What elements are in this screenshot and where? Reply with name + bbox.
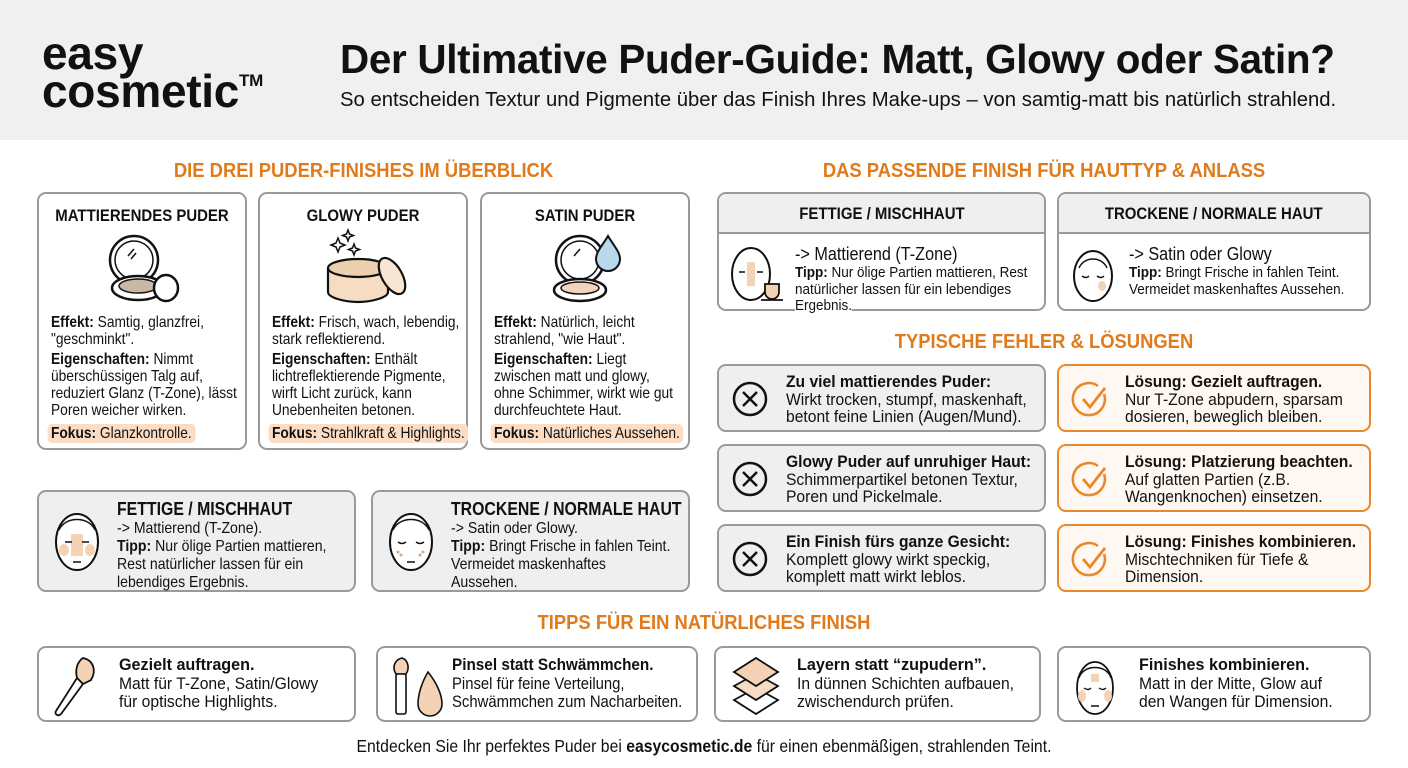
- panel: fettige haut (left): -> Mattierend (T-Zone).: [117, 520, 262, 537]
- panel: satin puder: SATIN PUDER: [535, 206, 635, 225]
- panel: fettige haut (right): [717, 192, 1046, 311]
- tipp 1: Gezielt auftragen.: [119, 655, 255, 674]
- text: Effekt: Samtig, glanzfrei, "geschminkt". Eigenschaften: Nimmt überschüssigen Talg auf, reduziert Glanz (T-Zone), lässt Poren weicher wirken.: [51, 314, 237, 419]
- panel: mattierendes puder: [37, 192, 247, 450]
- loesung 3: Mischtechniken für Tiefe & Dimension.: [1125, 550, 1308, 586]
- footer: Entdecken Sie Ihr perfektes Puder bei easycosmetic.de für einen ebenmäßigen, strahlenden Teint.: [357, 736, 1051, 756]
- fehler 3: [717, 524, 1046, 592]
- heading: hauttyp: DAS PASSENDE FINISH FÜR HAUTTYP & ANLASS: [823, 160, 1265, 182]
- tipp 4: den Wangen für Dimension.: [1139, 693, 1333, 711]
- icon: face: [389, 513, 433, 571]
- loesung 3: [1057, 524, 1371, 592]
- title: Der Ultimative Puder-Guide: Matt, Glowy oder Satin?: [340, 36, 1335, 82]
- panel: fettige haut (left): Tipp: Nur ölige Partien mattieren, Rest natürlicher lassen für ein lebendiges Ergebnis.: [117, 538, 326, 591]
- panel: satin puder: [480, 192, 690, 450]
- loesung 2: [1057, 444, 1371, 512]
- panel: fettige haut (right): -> Mattierend (T-Zone): [795, 244, 958, 264]
- icon: jar with sparkles: [326, 228, 406, 304]
- tipp 3: [714, 646, 1041, 722]
- panel: trockene haut (left): [371, 490, 690, 592]
- logo: cosmeticTM: [42, 65, 263, 117]
- icon: compact with drop: [552, 234, 621, 302]
- loesung 3: Lösung: Finishes kombinieren.: [1125, 532, 1356, 551]
- panel: satin puder: Fokus: Natürliches Aussehen.: [494, 425, 680, 442]
- panel: trockene haut (left): Aussehen.: [451, 574, 518, 591]
- header band: [0, 0, 1408, 140]
- tipp 2: Pinsel statt Schwämmchen.: [452, 655, 654, 674]
- panel: fettige haut (left): FETTIGE / MISCHHAUT: [117, 499, 292, 519]
- panel: satin puder: Effekt: Natürlich, leicht strahlend, "wie Haut". Eigenschaften: Liegt: [494, 314, 635, 368]
- panel: trockene haut (left): Tipp: Bringt Frische in fahlen Teint.: [451, 538, 670, 555]
- tipp 4: Matt in der Mitte, Glow auf: [1139, 674, 1322, 692]
- icon: face: [1073, 250, 1113, 302]
- fehler 2: [717, 444, 1046, 512]
- icon: layers: [732, 656, 780, 716]
- logo: easy: [42, 27, 143, 79]
- loesung 2: Auf glatten Partien (z.B. Wangenknochen) einsetzen.: [1125, 470, 1323, 506]
- tipp 1: für optische Highlights.: [119, 693, 278, 711]
- text: Fokus: Glanzkontrolle.: [51, 425, 192, 442]
- tipp 2: Schwämmchen zum Nacharbeiten.: [452, 693, 682, 711]
- panel: glowy puder: [258, 192, 468, 450]
- heading: finishes: DIE DREI PUDER-FINISHES IM ÜBERBLICK: [174, 160, 553, 182]
- panel: trockene haut (right): Tipp: Bringt Frische in fahlen Teint. Vermeidet maskenhaftes Aussehen.: [1129, 264, 1344, 298]
- fehler 1: Wirkt trocken, stumpf, maskenhaft, betont feine Linien (Augen/Mund).: [786, 390, 1027, 426]
- panel: trockene haut (left): Vermeidet maskenhaftes: [451, 556, 606, 573]
- tipp 3: zwischendurch prüfen.: [797, 693, 954, 711]
- fehler 2: Schimmerpartikel betonen Textur, Poren und Pickelmale.: [786, 470, 1018, 506]
- panel: trockene haut (right): -> Satin oder Glowy: [1129, 244, 1272, 264]
- fehler 1: Zu viel mattierendes Puder:: [786, 372, 991, 391]
- fehler 2: Glowy Puder auf unruhiger Haut:: [786, 452, 1031, 471]
- logo: [42, 27, 263, 117]
- icon: face: [55, 513, 99, 571]
- tipp 3: In dünnen Schichten aufbauen,: [797, 674, 1014, 692]
- loesung 1: [1057, 364, 1371, 432]
- icon: brush: [54, 657, 95, 716]
- tipp 2: [376, 646, 698, 722]
- panel: trockene haut (right): [1057, 192, 1371, 311]
- tipp 4: Finishes kombinieren.: [1139, 655, 1310, 674]
- loesung 1: Nur T-Zone abpudern, sparsam dosieren, beweglich bleiben.: [1125, 390, 1343, 426]
- icon: face with cup: [731, 247, 783, 301]
- loesung 1: Lösung: Gezielt auftragen.: [1125, 372, 1322, 391]
- panel: trockene haut (left): TROCKENE / NORMALE HAUT: [451, 499, 682, 519]
- heading: fehler: TYPISCHE FEHLER & LÖSUNGEN: [895, 331, 1193, 353]
- panel: satin puder: zwischen matt und glowy,: [494, 368, 650, 385]
- panel: fettige haut (left): [37, 490, 356, 592]
- tipp 2: Pinsel für feine Verteilung,: [452, 674, 625, 692]
- subtitle: So entscheiden Textur und Pigmente über das Finish Ihres Make-ups – von samtig-matt bis natürlich strahlend.: [340, 89, 1336, 111]
- heading: tipps: TIPPS FÜR EIN NATÜRLICHES FINISH: [538, 612, 870, 634]
- panel: trockene haut (left): -> Satin oder Glowy.: [451, 520, 578, 537]
- fehler 1: [717, 364, 1046, 432]
- panel: fettige haut (right): Tipp: Nur ölige Partien mattieren, Rest natürlicher lassen für ein lebendiges Ergebnis.: [795, 264, 1027, 314]
- icon: brush and sponge: [393, 657, 443, 717]
- panel: glowy puder: Effekt: Frisch, wach, lebendig, stark reflektierend. Eigenschaften: Enthält lichtreflektierende Pigmente, wirft Licht zurück, kann Unebenheiten betonen.: [272, 314, 459, 419]
- icon: compact: [108, 234, 180, 302]
- icon: face: [1076, 661, 1114, 715]
- loesung 2: Lösung: Platzierung beachten.: [1125, 452, 1353, 471]
- tipp 1: [37, 646, 356, 722]
- panel: glowy puder: Fokus: Strahlkraft & Highlights.: [272, 425, 465, 442]
- fehler 3: Ein Finish fürs ganze Gesicht:: [786, 532, 1010, 551]
- tipp 1: Matt für T-Zone, Satin/Glowy: [119, 674, 318, 692]
- panel: satin puder: ohne Schimmer, wirkt wie gut durchfeuchtete Haut.: [494, 385, 673, 419]
- panel: mattierendes puder: MATTIERENDES PUDER: [55, 206, 229, 225]
- tipp 3: Layern statt “zupudern”.: [797, 655, 986, 674]
- fehler 3: Komplett glowy wirkt speckig, komplett matt wirkt leblos.: [786, 550, 990, 586]
- tipp 4: [1057, 646, 1371, 722]
- panel: trockene haut (right): TROCKENE / NORMALE HAUT: [1105, 204, 1323, 223]
- panel: fettige haut (right): FETTIGE / MISCHHAUT: [799, 204, 964, 223]
- panel: glowy puder: GLOWY PUDER: [307, 206, 419, 225]
